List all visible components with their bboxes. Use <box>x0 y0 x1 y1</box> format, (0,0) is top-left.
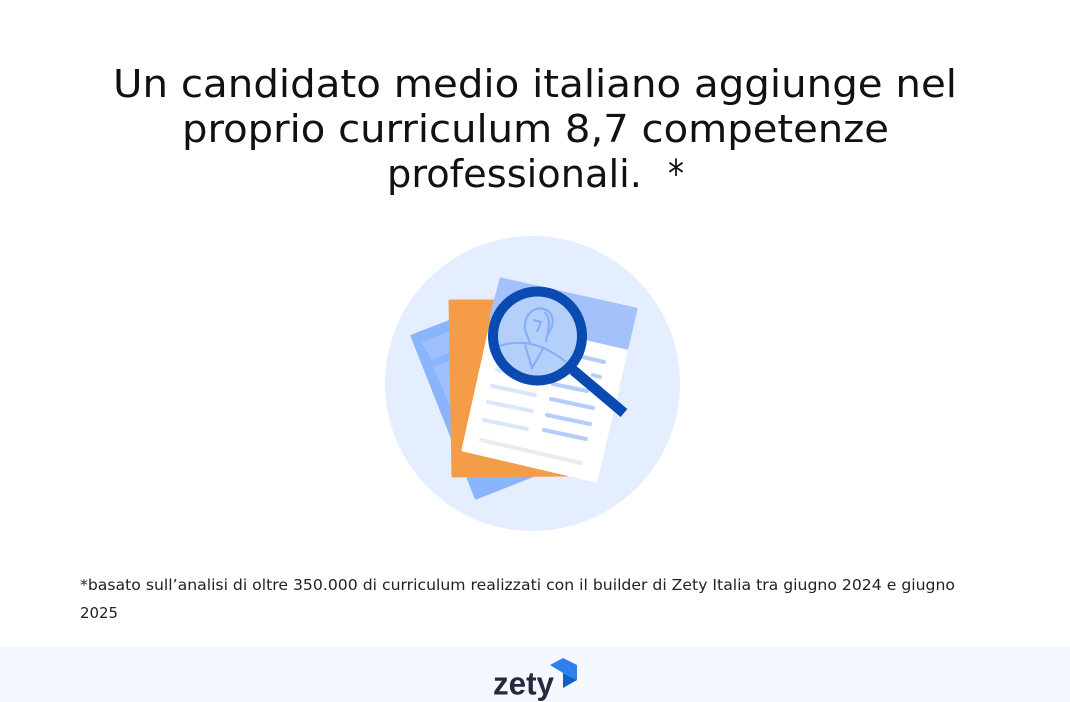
white resume <box>463 279 636 481</box>
logo: zety: zety <box>493 666 554 702</box>
logo: zety <box>493 658 577 702</box>
title: * <box>668 152 684 196</box>
title: professionali. <box>387 152 642 196</box>
handle <box>573 370 624 413</box>
lens ring <box>493 292 582 380</box>
title <box>113 62 957 196</box>
orange document <box>450 301 567 476</box>
footer band <box>0 646 1070 702</box>
footnote <box>80 576 955 622</box>
footnote: *basato sull’analisi di oltre 350.000 di curriculum realizzati con il builder di Zety Italia tra giugno 2024 e giugno <box>80 576 955 594</box>
title: proprio curriculum 8,7 competenze <box>182 107 889 151</box>
magnifying glass <box>493 292 624 413</box>
person in lens <box>499 309 566 368</box>
resume header <box>491 279 636 348</box>
back blue document <box>412 306 560 498</box>
illustration: documents under magnifying glass <box>385 236 680 531</box>
logo mark <box>550 658 577 688</box>
footnote: 2025 <box>80 604 118 622</box>
title: Un candidato medio italiano aggiunge nel <box>113 62 957 106</box>
background circle <box>385 236 680 531</box>
resume text lines <box>481 357 604 463</box>
